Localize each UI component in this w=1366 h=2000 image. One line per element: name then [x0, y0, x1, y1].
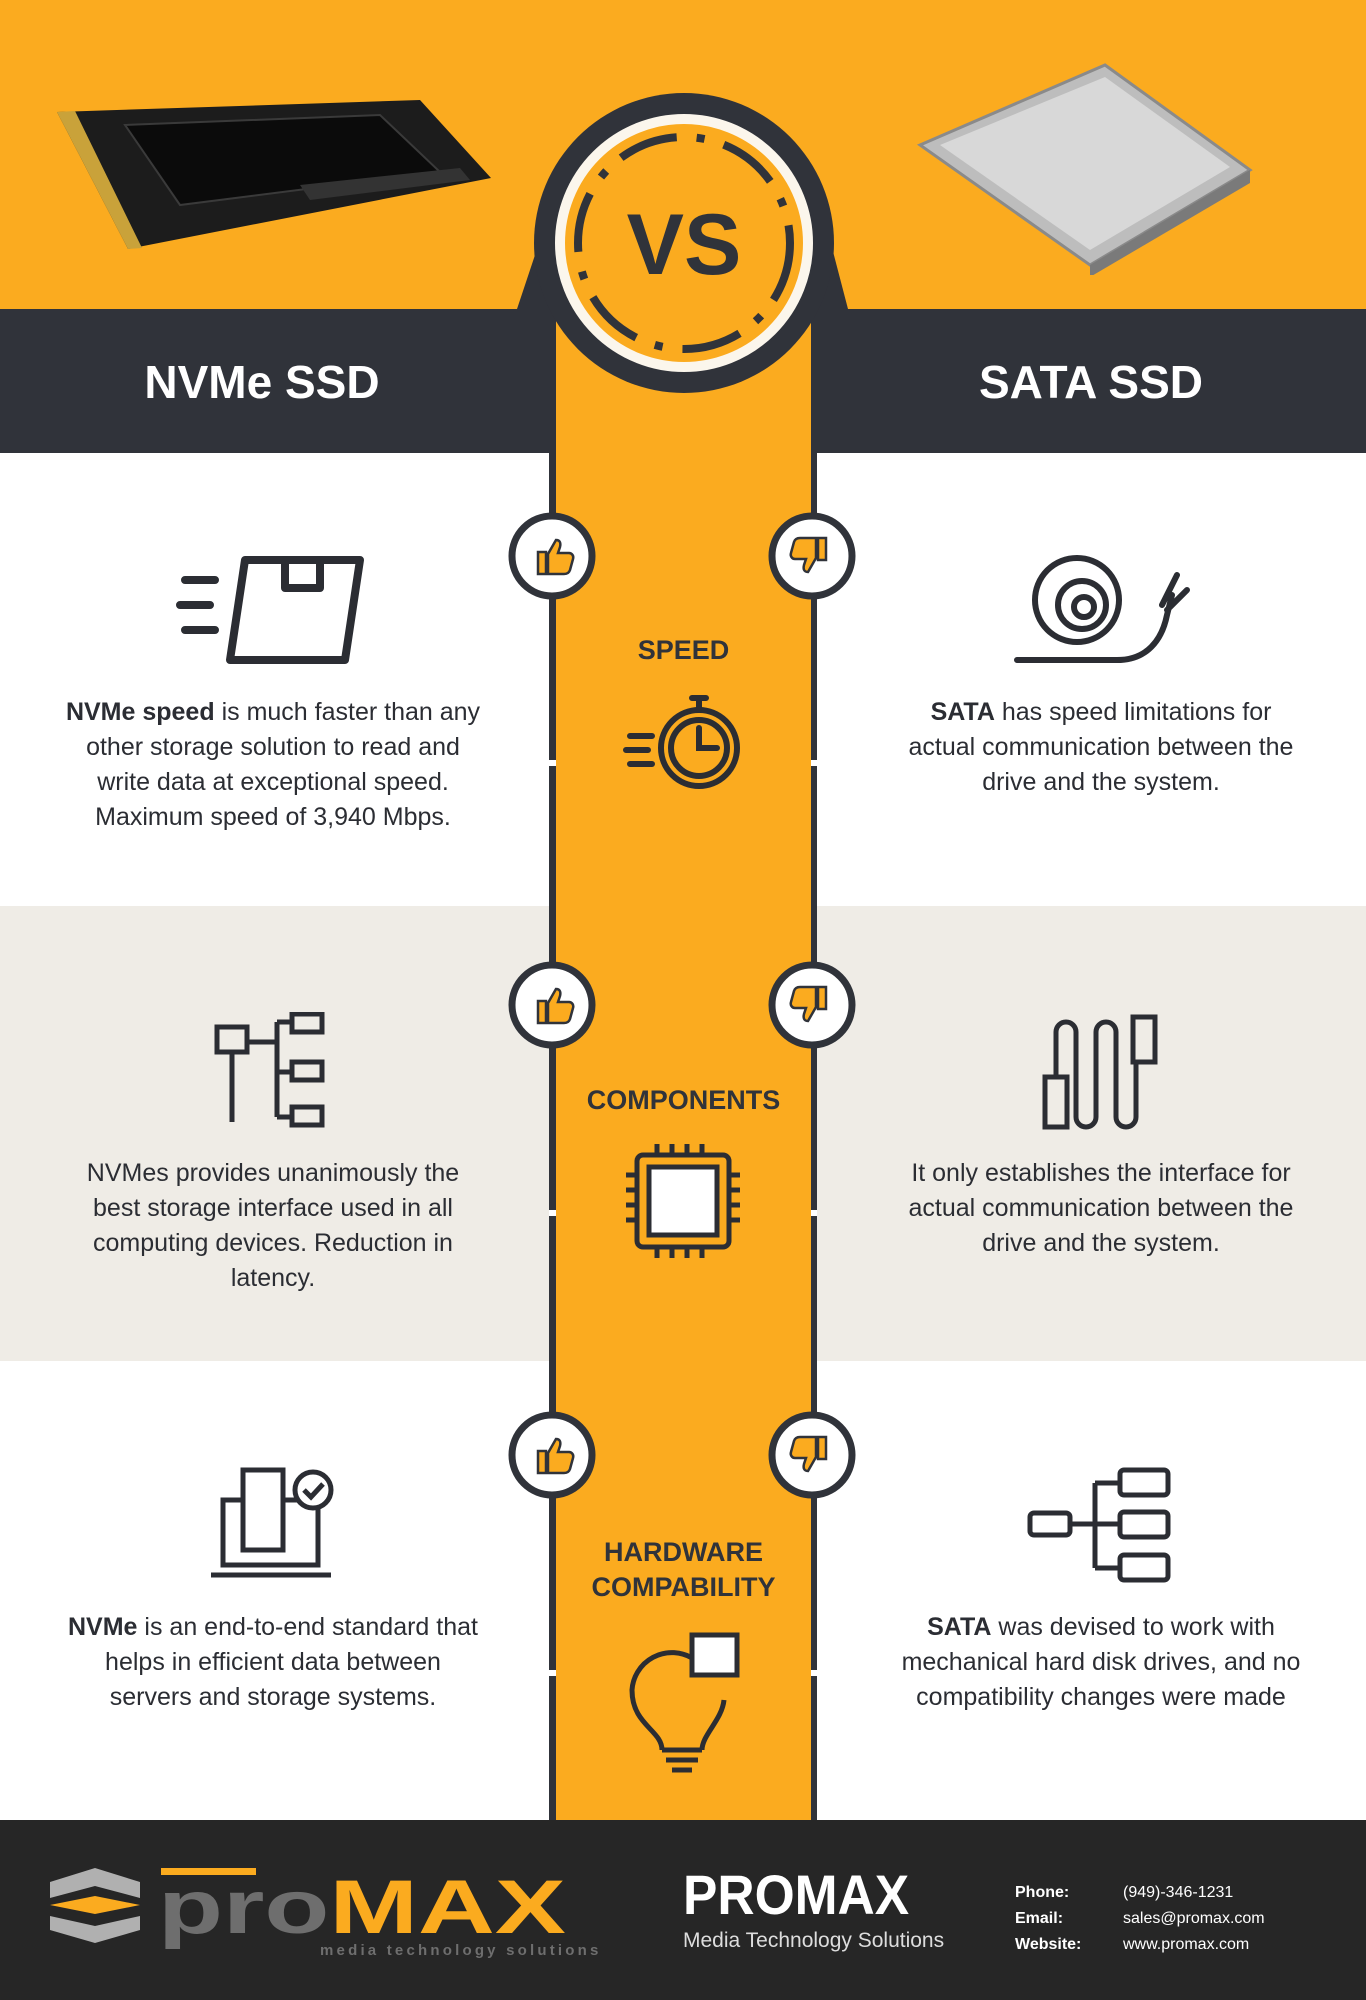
label: HARDWARE COMPABILITY: [592, 1537, 776, 1602]
label: SPEED: SPEED: [638, 635, 729, 665]
footer contacts: [1015, 1884, 1265, 1953]
footer contacts: Phone:: [1015, 1884, 1069, 1901]
label: HARDWARE COMPABILITY: COMPABILITY: [592, 1572, 776, 1602]
text: NVMe compatibility: NVMe is an end-to-end standard that helps in efficient data between servers and storage systems.: [68, 1613, 478, 1711]
footer contacts: sales@promax.com: [1123, 1910, 1265, 1927]
footer logo: media technology solutions: [320, 1942, 602, 1959]
footer company name: PROMAX: [683, 1863, 909, 1926]
footer logo: [50, 1865, 602, 1959]
label: COMPONENTS: COMPONENTS: [587, 1085, 780, 1115]
heading: NVMe SSD: NVMe SSD: [144, 356, 380, 408]
text: SATA speed: SATA has speed limitations for actual communication between the drive and the system.: [909, 698, 1293, 796]
heading: SATA SSD: SATA SSD: [979, 356, 1203, 408]
image: SATA SSD: [917, 63, 1253, 275]
VS badge: VS: [627, 197, 741, 293]
text: NVMe speed: NVMe speed is much faster than any other storage solution to read and write data at exceptional speed. Maximum speed of 3,940 Mbps.: [66, 698, 480, 831]
icon: devices check: [211, 1468, 334, 1578]
icon: network connectors: [214, 1012, 324, 1128]
footer contacts: (949)-346-1231: [1123, 1884, 1233, 1901]
footer logo: proMAX: [158, 1865, 566, 1950]
footer contacts: www.promax.com: [1123, 1936, 1249, 1953]
footer company name: Media Technology Solutions: [683, 1929, 944, 1952]
icon: snail: [1014, 555, 1190, 663]
VS badge: [534, 93, 834, 393]
icon: hierarchy: [1028, 1468, 1170, 1582]
footer company name: [683, 1863, 944, 1952]
text: SATA compatibility: SATA was devised to work with mechanical hard disk drives, and no compatibility changes were made: [902, 1613, 1300, 1711]
text: SATA components: It only establishes the interface for actual communication between the drive and the system.: [909, 1159, 1293, 1257]
footer contacts: Website:: [1015, 1936, 1081, 1953]
icon: fast box: [176, 556, 364, 664]
icon: puzzle bulb: [630, 1632, 740, 1772]
image: NVMe SSD stick: [57, 100, 491, 249]
text: NVMe components: NVMes provides unanimously the best storage interface used in all computing devices. Reduction in latency.: [87, 1159, 459, 1292]
label: HARDWARE COMPABILITY: HARDWARE: [604, 1537, 763, 1567]
icon: stopwatch: [623, 695, 740, 789]
footer contacts: Email:: [1015, 1910, 1063, 1927]
icon: cable: [1042, 1014, 1158, 1130]
icon: chip: [626, 1144, 740, 1258]
thumbs up icons: [508, 512, 856, 1498]
